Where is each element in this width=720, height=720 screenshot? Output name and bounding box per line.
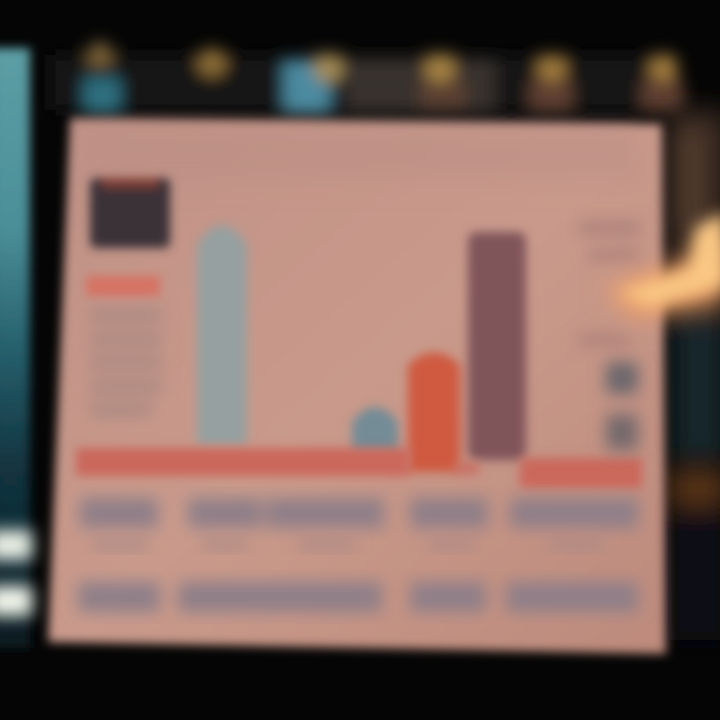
bar 3: [408, 352, 460, 472]
table row 1: [80, 498, 638, 528]
table row 2: [78, 582, 638, 612]
table row captions: [92, 538, 604, 550]
dark logo icon: [90, 178, 170, 248]
top strip of lights: [50, 42, 684, 114]
red heading: [86, 276, 160, 296]
right scene: [668, 110, 720, 640]
panel background: [48, 118, 666, 654]
bar 4: [468, 232, 526, 460]
panel top shade: [90, 130, 640, 180]
bar 2: [352, 407, 398, 452]
right annotation text: [578, 222, 640, 450]
red baseline: [76, 448, 642, 488]
bar 1: [197, 225, 247, 445]
panel: chart board: [48, 118, 666, 654]
bar chart: [197, 225, 526, 472]
left text block: [90, 310, 162, 415]
left teal strip: [0, 48, 30, 648]
left white labels: [0, 530, 32, 616]
glowing orange hand: [605, 212, 720, 318]
